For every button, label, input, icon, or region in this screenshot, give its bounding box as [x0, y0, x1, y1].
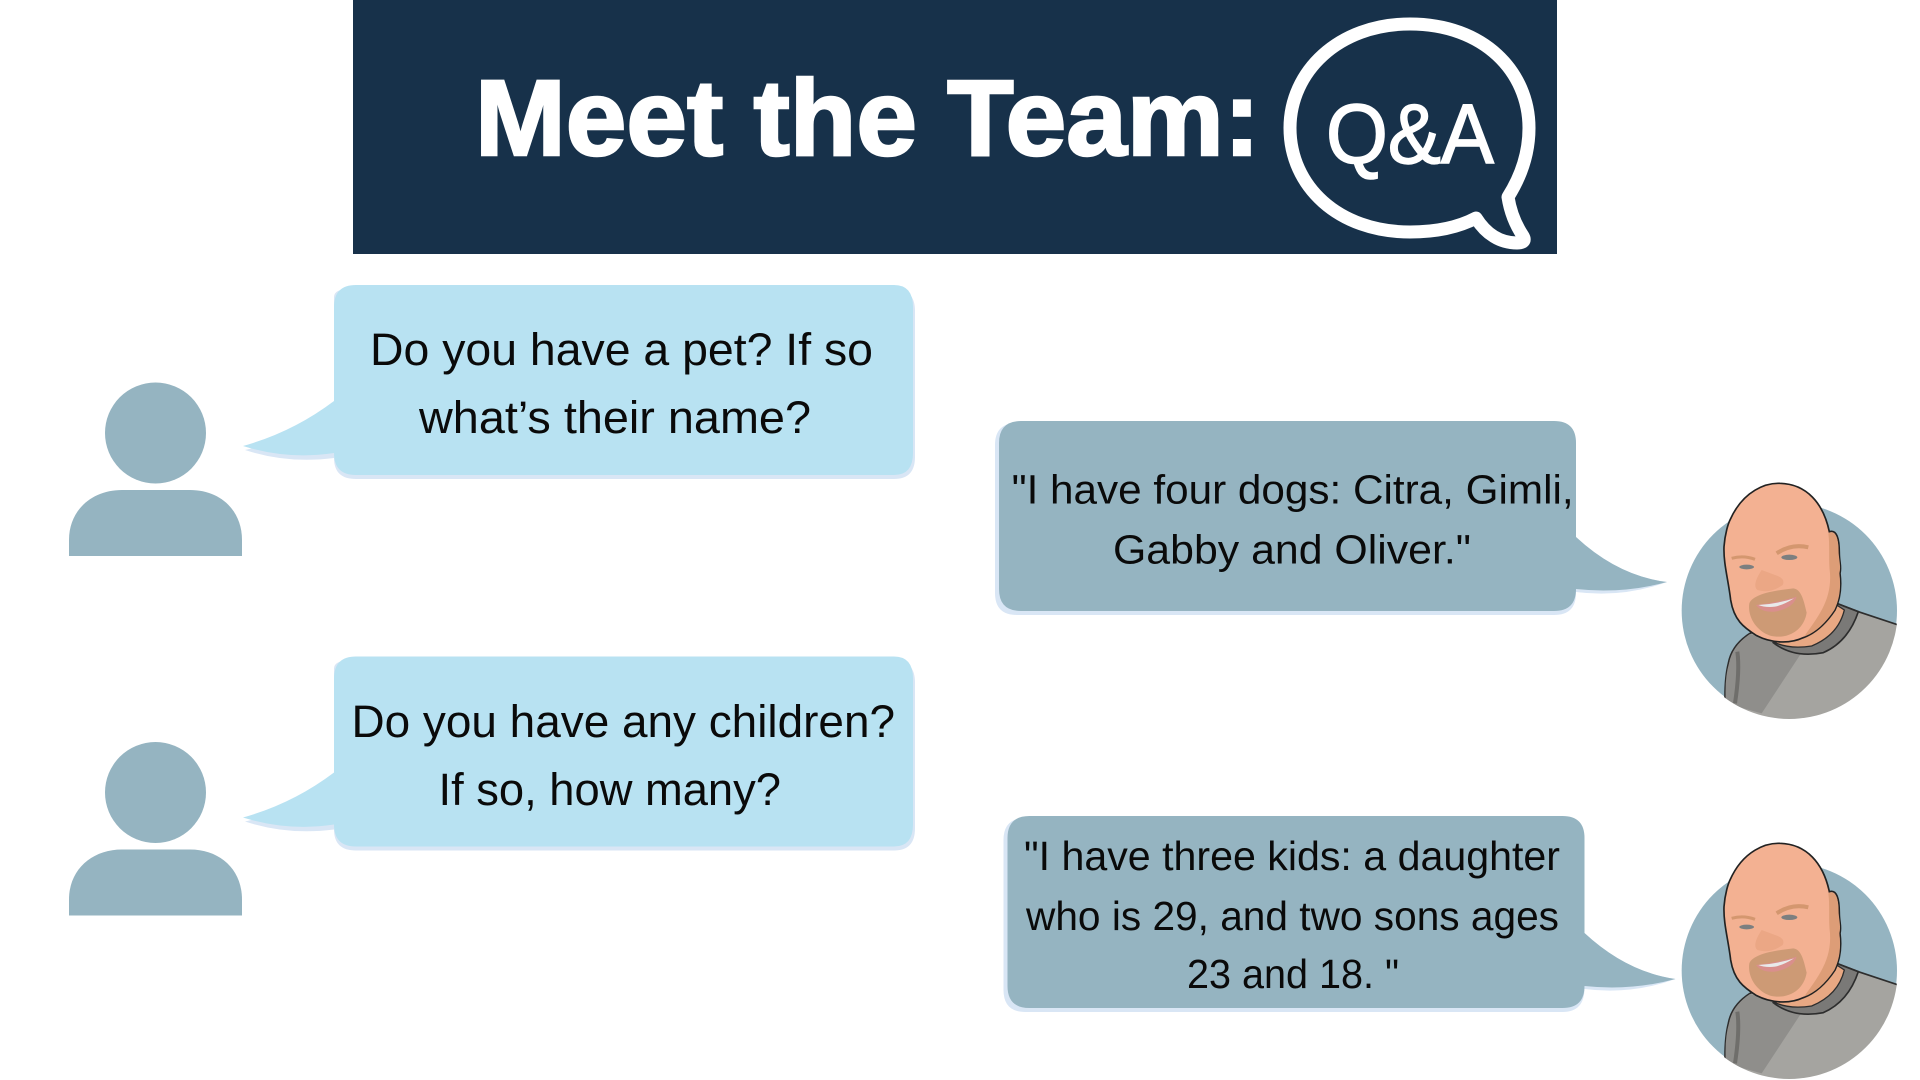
head shading — [1804, 533, 1840, 637]
title: Meet the Team: — [475, 57, 1260, 178]
shirt — [1723, 963, 1903, 1080]
question bubble 2 — [243, 656, 915, 850]
avatar 1 — [1682, 483, 1903, 730]
answer text 1 — [1012, 466, 1574, 572]
question text 1 — [370, 324, 873, 443]
answer text 1: Gabby and Oliver." — [1113, 526, 1471, 572]
question text 1: what’s their name? — [418, 392, 811, 443]
question text 2 — [352, 696, 895, 815]
answer text 2 — [1024, 833, 1560, 997]
neck and collar — [1773, 603, 1858, 654]
mouth — [1756, 597, 1797, 612]
answer text 2: who is 29, and two sons ages — [1025, 893, 1559, 939]
icon: Q&A speech bubble — [1290, 24, 1529, 243]
header banner — [353, 0, 1557, 254]
answer bubble 1 — [995, 421, 1667, 615]
head — [1724, 483, 1841, 642]
avatar 2 — [1682, 843, 1903, 1080]
answer bubble 2 — [1004, 816, 1676, 1012]
question text 2: Do you have any children? — [352, 696, 895, 747]
answer text 2: "I have three kids: a daughter — [1024, 833, 1560, 879]
eyes and brows — [1732, 546, 1808, 591]
mouth — [1756, 957, 1797, 972]
goatee — [1749, 948, 1807, 997]
head — [1724, 843, 1841, 1002]
person icon 1 — [69, 382, 242, 556]
person icon 2 — [69, 742, 242, 916]
answer text 2: 23 and 18. " — [1187, 951, 1399, 997]
question text 2: If so, how many? — [438, 764, 781, 815]
Q&A label: Q&A — [1326, 87, 1494, 181]
question bubble 1 — [243, 285, 915, 479]
answer text 1: "I have four dogs: Citra, Gimli, — [1012, 466, 1574, 512]
shirt — [1724, 603, 1897, 719]
question text 1: Do you have a pet? If so — [370, 324, 873, 375]
head shading — [1804, 893, 1840, 997]
goatee — [1749, 588, 1807, 637]
neck and collar — [1773, 963, 1858, 1014]
eyes and brows — [1732, 906, 1808, 951]
